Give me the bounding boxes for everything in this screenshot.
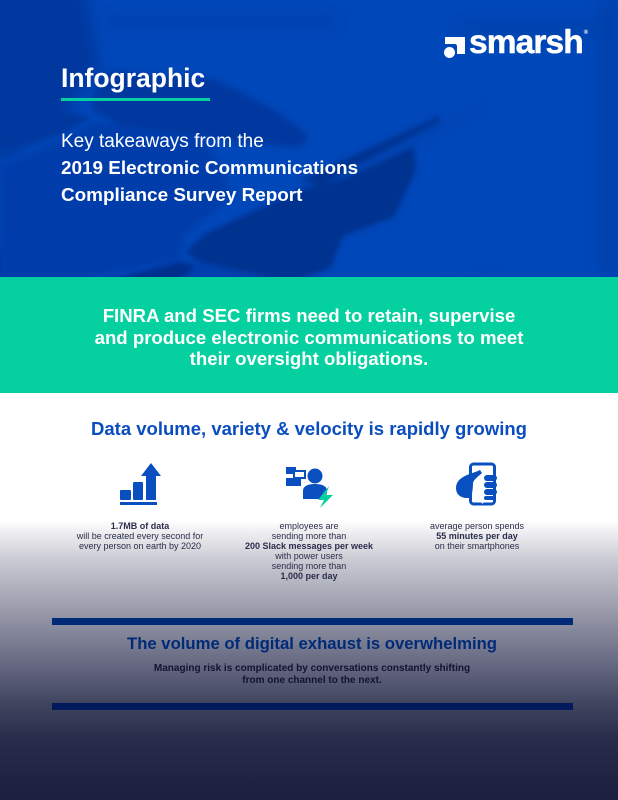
logo mark [444,37,465,58]
panel: green statement band [0,277,618,393]
text: smartphone stat: average person spends [430,521,524,531]
text: Slack stat [245,521,373,581]
text: smartphone stat: on their smartphones [435,541,519,551]
statement text: their oversight obligations. [190,348,428,369]
title: Infographic: Infographic [61,63,205,93]
holding hand [185,146,416,288]
text: Slack stat: 1,000 per day [280,571,338,581]
text: Slack stat: with power users [275,551,343,561]
text: 1.7MB stat: every person on earth by 2020 [79,541,201,551]
bottom divider bar [52,703,573,710]
text: smartphone stat [430,521,524,551]
panel: lower background gradient [0,393,618,800]
text: Slack stat: employees are [279,521,339,531]
hand: back of pointing hand [0,122,232,292]
text: smartphone stat: 55 minutes per day [436,531,518,541]
statement text [95,305,524,369]
statement text: and produce electronic communications to meet [95,326,523,348]
icon: bar chart with arrow [120,463,161,505]
text: 1.7MB stat: 1.7MB of data [111,521,169,531]
subtitle: Compliance Survey Report [61,185,302,206]
text: managing risk: from one channel to the next. [242,674,382,686]
panel: hero photo banner [0,0,618,277]
heading: data volume: Data volume, variety & velocity is rapidly growing [91,418,527,439]
subtitle [61,131,358,206]
subtitle: Key takeaways from the [61,131,264,152]
photo: hands holding a smartphone [0,0,616,277]
text: Slack stat: 200 Slack messages per week [245,541,373,551]
text: Slack stat: sending more than [272,531,346,541]
top divider bar [52,618,573,625]
icon: hand holding smartphone [456,462,497,506]
title underline [61,98,210,101]
text: managing risk [154,663,470,686]
text: 1.7MB stat: will be created every second for [77,531,203,541]
logo wordmark: smarsh® [469,24,588,61]
phone [205,104,487,235]
statement text: FINRA and SEC firms need to retain, supervise [103,305,515,326]
text: Slack stat: sending more than [272,561,346,571]
text: managing risk: Managing risk is complicated by conversations constantly shifting [154,663,470,674]
pointing finger [92,71,307,147]
subtitle: 2019 Electronic Communications [61,158,358,179]
icon: employee with chat bubbles and bolt [286,467,333,508]
text: 1.7MB stat [76,521,204,551]
heading: digital exhaust: The volume of digital exhaust is overwhelming [127,634,497,653]
